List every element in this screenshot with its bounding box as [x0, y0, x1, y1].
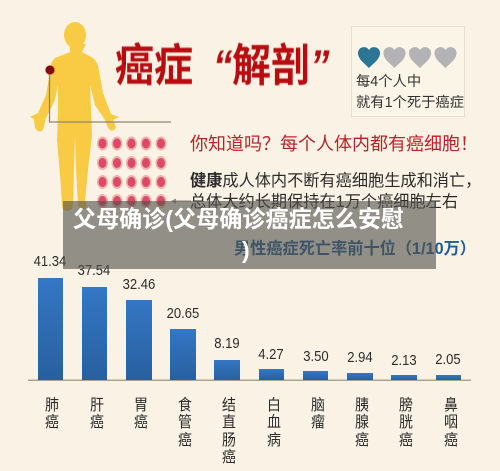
banner title: 父母确诊(父母确诊癌症怎么安慰: [73, 206, 404, 232]
values: 32.46: [122, 277, 155, 293]
title quoted word: “: [213, 42, 232, 91]
title quoted word: 解剖”: [232, 42, 330, 91]
icon: grid of cancer cells: [97, 136, 166, 208]
red question: 你知道吗？每个人体内都有癌细胞！: [190, 134, 478, 154]
values: 2.05: [435, 352, 461, 368]
category labels: 白血病: [267, 397, 281, 449]
arrow: cells to text: [171, 198, 191, 204]
category labels: 膀胱癌: [399, 397, 413, 449]
body text: 健康成人体内不断有癌细胞生成和消亡，: [190, 172, 481, 190]
banner title: [73, 206, 404, 263]
category labels: [45, 396, 458, 466]
body text: 总体大约长期保持在1万个癌细胞左右: [190, 192, 458, 210]
title: 癌症: [115, 42, 193, 91]
stat caption: 每4个人中: [356, 74, 421, 90]
values: 8.19: [214, 336, 240, 352]
bars: [38, 278, 461, 380]
category labels: 食管癌: [178, 397, 192, 449]
body text: [190, 172, 481, 210]
icon: four hearts: [358, 47, 456, 68]
values: [34, 254, 461, 369]
bar chart: [34, 254, 461, 466]
values: 2.94: [347, 350, 373, 366]
chart baseline: [28, 380, 471, 381]
values: 41.34: [34, 254, 66, 270]
values: 2.13: [391, 353, 417, 369]
category labels: 鼻咽癌: [444, 397, 458, 449]
icon: tumour marker and pointer line: [46, 66, 171, 122]
category labels: 肺癌: [45, 397, 59, 431]
values: 20.65: [167, 306, 199, 322]
panel: statistic box: [352, 26, 464, 116]
banner overlay: [63, 201, 436, 269]
values: 37.54: [78, 263, 110, 279]
stat caption: 就有1个死于癌症: [356, 95, 464, 111]
category labels: 脑瘤: [311, 397, 325, 431]
icon: human silhouette: [30, 22, 119, 211]
category labels: 结直肠癌: [222, 397, 236, 466]
category labels: 胃癌: [134, 397, 148, 431]
values: 3.50: [303, 349, 328, 365]
stat caption: [356, 74, 464, 111]
category labels: 肝癌: [90, 397, 104, 431]
chart heading: 男性癌症死亡率前十位（1/10万）: [234, 240, 476, 258]
category labels: 胰腺癌: [355, 397, 369, 449]
banner title: ): [242, 237, 250, 263]
values: 4.27: [258, 347, 284, 363]
